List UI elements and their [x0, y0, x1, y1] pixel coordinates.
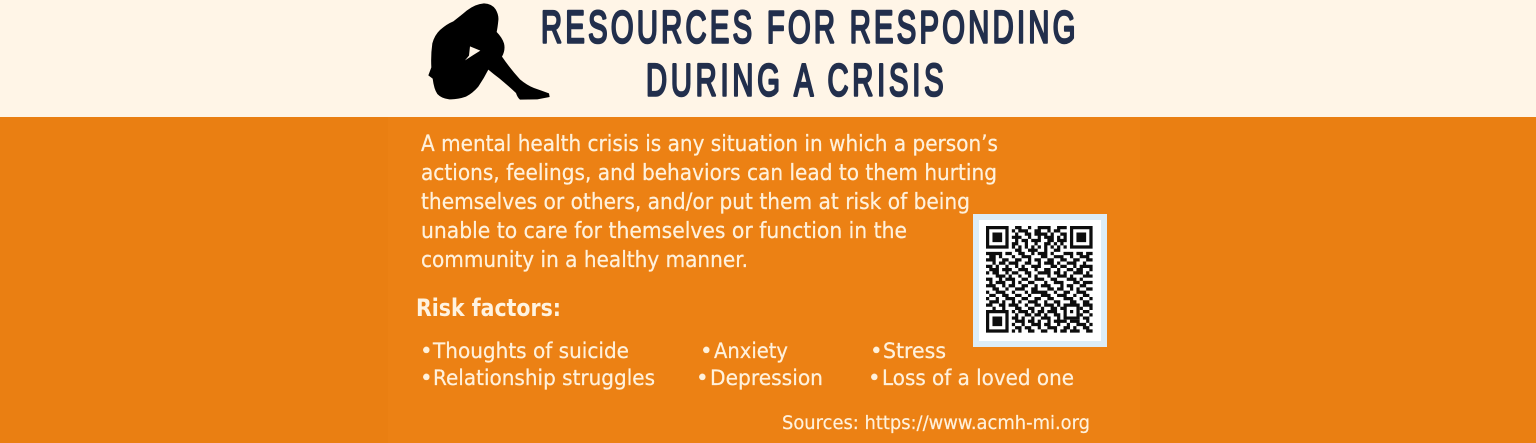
risk factors list — [420, 339, 1074, 391]
intro paragraph: A mental health crisis is any situation in which a person’s — [421, 132, 998, 157]
QR code — [973, 214, 1107, 347]
risk factors list: • — [868, 366, 881, 391]
risk factors list: Thoughts of suicide — [432, 339, 629, 364]
intro paragraph: actions, feelings, and behaviors can lead to them hurting — [421, 161, 997, 186]
intro paragraph: community in a healthy manner. — [421, 248, 748, 273]
risk factors list: Stress — [883, 339, 946, 364]
risk factors list: • — [696, 366, 709, 391]
intro paragraph: themselves or others, and/or put them at risk of being — [421, 190, 970, 215]
icon: crouching person silhouette — [428, 3, 550, 100]
title — [541, 2, 1075, 106]
title line 2: DURING A CRISIS — [646, 55, 944, 106]
risk factors list: Loss of a loved one — [882, 366, 1074, 391]
risk factors list: Anxiety — [714, 339, 788, 364]
risk factors list: • — [420, 366, 433, 391]
risk factors list: • — [700, 339, 713, 364]
intro paragraph — [421, 132, 998, 273]
sources line: Sources: https://www.acmh-mi.org — [782, 412, 1090, 434]
orange background panel — [0, 117, 1536, 443]
title line 1: RESOURCES FOR RESPONDING — [541, 2, 1075, 53]
risk factors list: Relationship struggles — [433, 366, 655, 391]
header band — [0, 0, 1536, 117]
intro paragraph: unable to care for themselves or function in the — [421, 219, 907, 244]
risk factors heading: Risk factors: — [416, 294, 561, 322]
risk factors list: Depression — [710, 366, 823, 391]
risk factors list: • — [420, 339, 433, 364]
risk factors list: • — [870, 339, 883, 364]
